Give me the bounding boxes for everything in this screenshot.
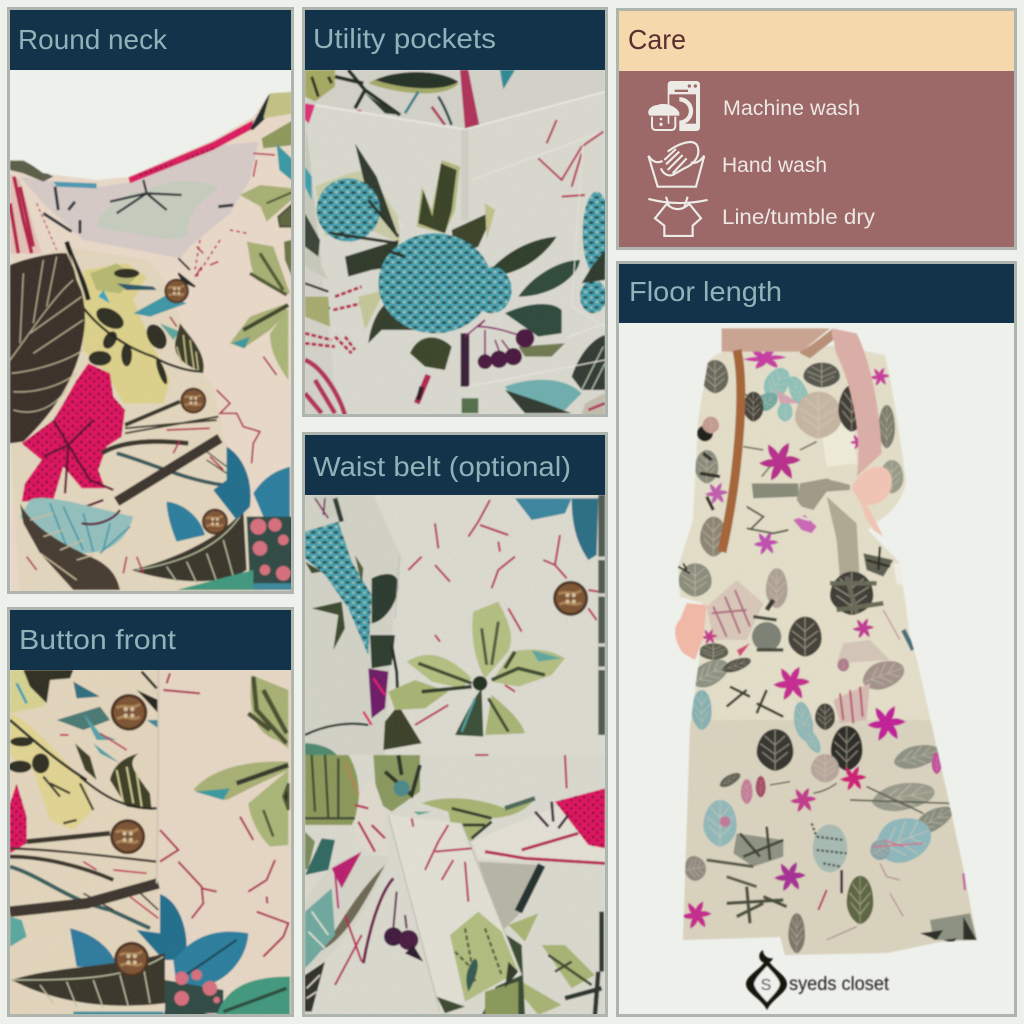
header: Care (619, 11, 1014, 71)
icon: hand in wash basin (648, 142, 704, 187)
care item: machine wash (648, 81, 860, 132)
brand logo (746, 950, 890, 1010)
logo mark: S (761, 977, 771, 994)
panel: care (618, 10, 1016, 248)
header: Round neck: Round neck (18, 24, 168, 55)
photo: pocket close-up (305, 70, 611, 415)
label: Machine wash: Machine wash (723, 97, 860, 120)
left hand (675, 603, 707, 660)
care item: hand wash (648, 142, 827, 187)
header: Floor length (619, 264, 1014, 323)
icon: washing machine and basin (648, 81, 700, 132)
header: Button front (10, 610, 291, 670)
icon: shirt on line (648, 197, 708, 236)
label: Hand wash: Hand wash (722, 154, 827, 177)
panel: utility pockets (304, 8, 611, 416)
header: Care: Care (628, 24, 686, 55)
care item: line or tumble dry (648, 197, 876, 236)
brand name: syeds closet (789, 974, 890, 995)
header: Round neck (10, 10, 291, 70)
photo: button placket close-up (9, 670, 293, 1017)
panel: waist belt (304, 434, 606, 1016)
logo mark (746, 950, 787, 1010)
header: Waist belt: Waist belt (optional) (313, 451, 571, 482)
header: Waist belt (305, 435, 605, 495)
label: Line/tumble dry: Line/tumble dry (722, 206, 876, 229)
scarf (722, 328, 882, 477)
dress with floral print (677, 344, 978, 956)
panel: round neck (8, 8, 293, 597)
header: Button front: Button front (19, 624, 176, 655)
header: Utility pockets (305, 10, 605, 70)
panel: floor length (618, 262, 1016, 1016)
right hand (852, 466, 892, 537)
photo: full length dress (660, 328, 990, 1010)
header: Floor length: Floor length (629, 276, 782, 307)
panel: button front (8, 608, 293, 1017)
header: Utility pockets: Utility pockets (313, 23, 496, 54)
photo: waist belt close-up (305, 495, 605, 1015)
bag strap (722, 350, 741, 552)
photo: round neck close-up (10, 70, 293, 597)
